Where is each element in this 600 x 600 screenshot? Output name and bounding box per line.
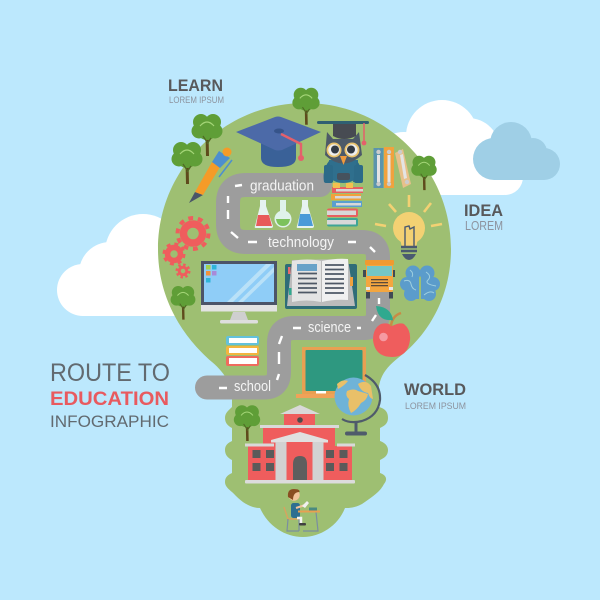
- blue cloud: [473, 122, 560, 180]
- icon: book stack: [226, 336, 259, 366]
- heading: LEARN: LEARN: [168, 76, 223, 95]
- icon: globe: [334, 375, 380, 436]
- heading: IDEA: LOREM: [465, 219, 503, 233]
- icon: graduation cap: [236, 116, 321, 167]
- icon: blackboard: [296, 347, 366, 398]
- heading: WORLD: [404, 380, 466, 412]
- road label: technology: technology: [268, 234, 334, 251]
- road label: school: school: [234, 378, 271, 395]
- heading: IDEA: IDEA: [464, 201, 503, 220]
- icon: brain: [400, 266, 440, 301]
- icon: open book: [285, 259, 357, 309]
- icon: pencil: [189, 148, 232, 203]
- road label: graduation: graduation: [250, 178, 314, 194]
- icon: school bus: [363, 260, 395, 298]
- heading: WORLD: LOREM IPSUM: [405, 401, 466, 412]
- road label: science: science: [308, 319, 351, 336]
- icon: school building: [245, 405, 355, 484]
- trees: [171, 88, 437, 441]
- title: EDUCATION: [50, 389, 169, 410]
- heading: WORLD: WORLD: [404, 380, 466, 399]
- icon: flasks: [255, 200, 314, 228]
- title: [50, 359, 170, 431]
- heading: LEARN: [168, 76, 224, 106]
- icon: idea bulb: [375, 195, 442, 260]
- title: INFOGRAPHIC: [50, 412, 169, 431]
- light bulb shape: [158, 103, 451, 537]
- title: ROUTE TO: [50, 359, 170, 387]
- left white cloud: [57, 214, 193, 316]
- icon: binders: [374, 147, 411, 188]
- icon: gears: [164, 218, 208, 277]
- icon: owl on books: [317, 121, 369, 226]
- icon: computer monitor: [201, 261, 277, 324]
- right white cloud: [368, 100, 523, 204]
- heading: LEARN: LOREM IPSUM: [169, 95, 224, 106]
- icon: student at desk: [284, 489, 320, 531]
- icon: apple: [373, 306, 410, 357]
- heading: IDEA: [464, 201, 503, 233]
- road: [207, 185, 379, 388]
